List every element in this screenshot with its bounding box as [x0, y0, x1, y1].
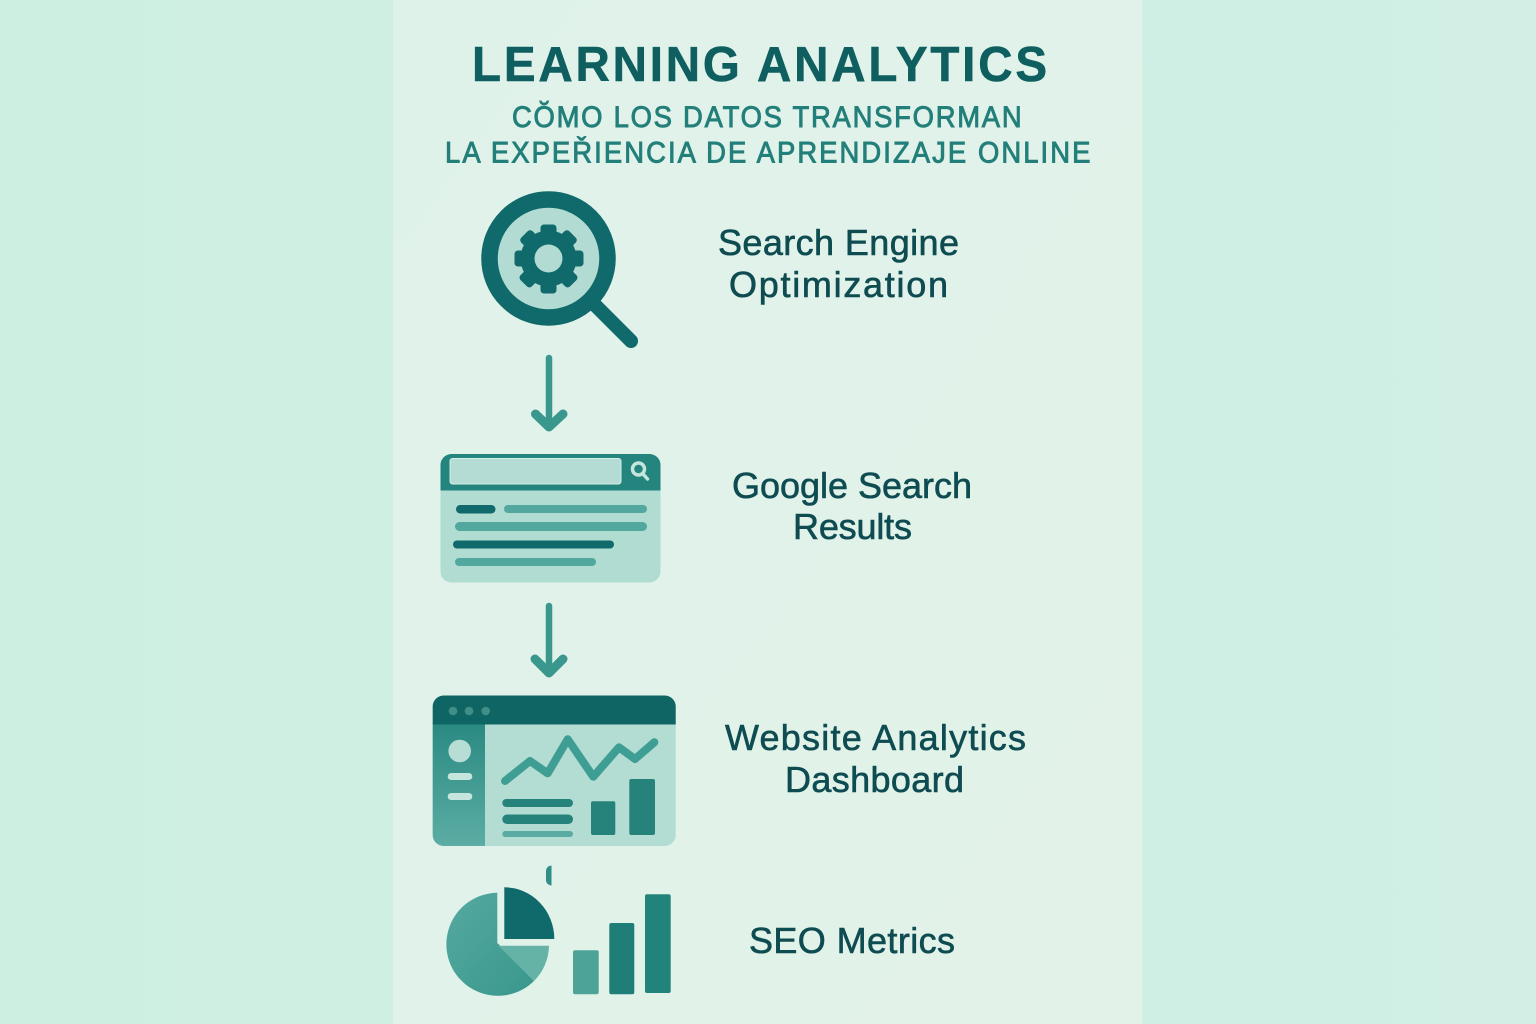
- label: website analytics dashboard: Dashboard: [785, 759, 964, 800]
- title: LEARNING ANALYTICS: [472, 37, 1047, 92]
- icon: magnifying glass with gear: [490, 200, 631, 341]
- label: search engine optimization: Optimization: [729, 264, 948, 305]
- search glass: [632, 463, 648, 479]
- line chart: [505, 739, 654, 781]
- label: google search results: Results: [793, 506, 912, 547]
- icon: pie chart and bars: [446, 887, 671, 996]
- label: google search results: Google Search: [732, 465, 972, 506]
- subtitle: [445, 101, 1090, 170]
- icon: search results window: [440, 454, 660, 582]
- label: website analytics dashboard: [725, 717, 1026, 800]
- pie chart: [446, 887, 554, 996]
- label: search engine optimization: [718, 222, 959, 305]
- arrow 1: [536, 358, 563, 427]
- arrow 2: [535, 606, 563, 673]
- subtitle: CŎMO LOS DATOS TRANSFORMAN: [512, 101, 1022, 134]
- subtitle: LA EXPEŘIENCIA DE APRENDIZAJE ONLINE: [445, 137, 1090, 170]
- bar chart: [573, 894, 671, 994]
- label: search engine optimization: Search Engine: [718, 222, 959, 263]
- central panel: [393, 0, 1142, 1024]
- icon: analytics dashboard: [433, 696, 676, 846]
- label: seo metrics: SEO Metrics: [749, 920, 955, 961]
- label: google search results: [732, 465, 972, 547]
- label: website analytics dashboard: Website Analytics: [725, 717, 1026, 758]
- arrow stub: [546, 866, 552, 886]
